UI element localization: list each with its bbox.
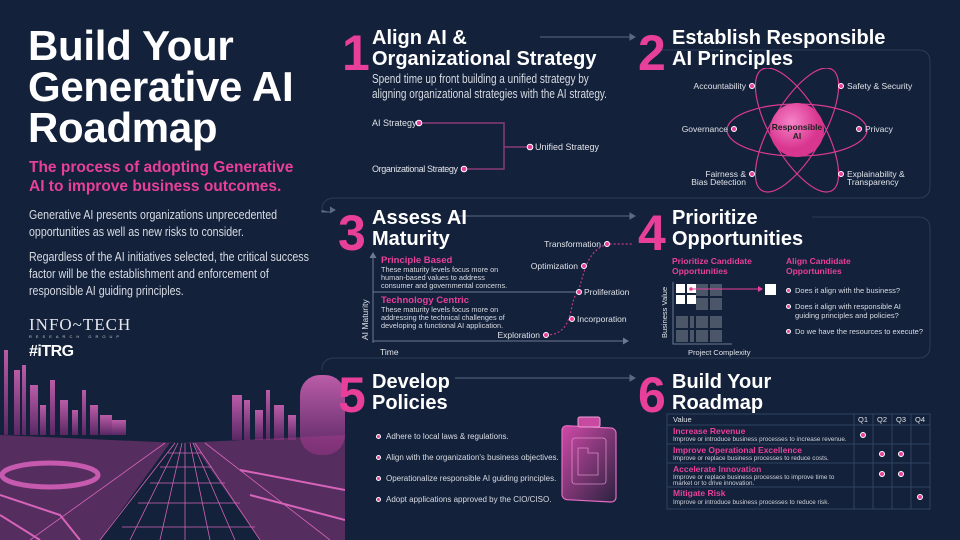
roadmap table: Value (673, 415, 692, 424)
chart: maturity curve: These maturity levels focus more on (381, 265, 498, 274)
align questions: guiding principles and policies? (795, 311, 899, 320)
title: Build Your (28, 22, 233, 69)
section 4 (638, 205, 923, 357)
subtitle: AI to improve business outcomes. (29, 178, 281, 195)
title 3: Maturity (372, 228, 450, 250)
title: Generative AI (28, 63, 293, 110)
chart: maturity curve: Exploration (497, 330, 540, 340)
roadmap table: Improve or introduce business processes to reduce risk. (673, 499, 829, 506)
title 2 (672, 27, 885, 70)
logo: #iTRG: #iTRG (29, 343, 74, 360)
title 3 (372, 207, 467, 250)
diagram: principles atom: Accountability (694, 81, 747, 91)
intro text (29, 208, 309, 298)
roadmap table: Q1 (858, 415, 868, 424)
diagram: principles atom: Bias Detection (691, 177, 746, 187)
policy list: Adhere to local laws & regulations. (386, 432, 509, 441)
chart: maturity curve: Principle Based (381, 255, 452, 266)
icon: clipboard (561, 416, 617, 503)
title 6: Build Your (672, 371, 771, 393)
matrix chart (660, 282, 776, 357)
title 2: AI Principles (672, 48, 793, 70)
roadmap table: Q3 (896, 415, 906, 424)
intro text: factor will be the establishment and enforcement of (29, 267, 269, 281)
roadmap table: Q2 (877, 415, 887, 424)
text 1: Spend time up front building a unified strategy by (372, 72, 589, 86)
diagram: principles atom: Transparency (847, 177, 899, 187)
section 1 (342, 25, 607, 174)
align questions (786, 286, 923, 336)
number 1: 1 (342, 25, 370, 81)
title 6: Roadmap (672, 392, 763, 414)
title 3: Assess AI (372, 207, 467, 229)
align questions: Does it align with the business? (795, 286, 900, 295)
section 3 (338, 205, 632, 357)
matrix chart: Project Complexity (688, 348, 751, 357)
diagram: unified strategy: Organizational Strategy (372, 164, 458, 174)
policy list: Align with the organization's business objectives. (386, 453, 559, 462)
roadmap table: market or to drive innovation. (673, 480, 754, 487)
title 1 (372, 27, 596, 70)
diagram: principles atom: Governance (682, 124, 728, 134)
diagram: principles atom: Safety & Security (847, 81, 913, 91)
prioritize subheading: Opportunities (672, 266, 728, 276)
policy list (376, 432, 559, 504)
subtitle: The process of adopting Generative (29, 159, 293, 176)
logo: Info-Tech: RESEARCH GROUP (29, 334, 123, 339)
title: Roadmap (28, 104, 217, 151)
diagram: principles atom: Fairness & (705, 169, 746, 179)
roadmap table: Improve or replace business processes to improve time to (673, 474, 835, 481)
number 3: 3 (338, 205, 366, 261)
diagram: principles atom: AI (793, 131, 801, 141)
number 6: 6 (638, 367, 666, 423)
chart: maturity curve: consumer and governmental concerns. (381, 281, 507, 290)
section 2 (638, 25, 913, 193)
background city illustration (0, 350, 345, 540)
chart: maturity curve: Proliferation (584, 287, 630, 297)
intro text: responsible AI guiding principles. (29, 284, 184, 298)
align subheading (786, 256, 851, 276)
chart: maturity curve: Technology Centric (381, 295, 469, 306)
diagram: unified strategy (372, 118, 600, 174)
section 5 (338, 367, 617, 504)
roadmap table: Improve or introduce business processes to increase revenue. (673, 436, 847, 443)
align subheading: Align Candidate (786, 256, 851, 266)
roadmap table (666, 414, 930, 510)
policy list: Adopt applications approved by the CIO/CISO. (386, 495, 551, 504)
title 4 (672, 207, 803, 250)
number 2: 2 (638, 25, 666, 81)
title (28, 22, 293, 151)
chart: maturity curve: developing a functional AI application. (381, 321, 503, 330)
chart: maturity curve: addressing the technical challenges of (381, 313, 506, 322)
chart: maturity curve: AI Maturity (360, 299, 370, 340)
diagram: principles atom: Privacy (865, 124, 894, 134)
chart: maturity curve: human-based values to address (381, 273, 485, 282)
diagram: principles atom: Explainability & (847, 169, 905, 179)
roadmap table: Q4 (915, 415, 925, 424)
roadmap table: Improve Operational Excellence (673, 445, 802, 455)
text 1 (372, 72, 607, 101)
section 6 (638, 367, 930, 510)
number 4: 4 (638, 205, 666, 261)
title 4: Prioritize (672, 207, 758, 229)
diagram: principles atom: Responsible (772, 122, 823, 132)
title 5: Develop (372, 371, 450, 393)
align subheading: Opportunities (786, 266, 842, 276)
roadmap table: Accelerate Innovation (673, 464, 761, 474)
title 1: Organizational Strategy (372, 48, 596, 70)
align questions: Does it align with responsible AI (795, 302, 901, 311)
number 5: 5 (338, 367, 366, 423)
prioritize subheading (672, 256, 752, 276)
intro text: opportunities as well as new risks to consider. Regardless of the AI initiatives selected, the critical success (29, 225, 309, 264)
subtitle (29, 159, 293, 195)
diagram: unified strategy: AI Strategy (372, 118, 417, 128)
intro text: Generative AI presents organizations unprecedented (29, 208, 277, 222)
title 6 (672, 371, 771, 414)
align questions: Do we have the resources to execute? (795, 327, 923, 336)
matrix chart: Business Value (660, 287, 669, 338)
roadmap table: Mitigate Risk (673, 488, 726, 498)
logo: Info-Tech: INFO~TECH (29, 315, 131, 334)
title 1: Align AI & (372, 27, 467, 49)
title 2: Establish Responsible (672, 27, 885, 49)
text 1: aligning organizational strategies with the AI strategy. (372, 87, 607, 101)
chart: maturity curve: Incorporation (577, 314, 627, 324)
diagram: principles atom (682, 68, 913, 193)
roadmap table: Improve or replace business processes to reduce costs. (673, 455, 829, 462)
chart: maturity curve: These maturity levels focus more on (381, 305, 498, 314)
chart: maturity curve: Time (380, 347, 399, 357)
policy list: Operationalize responsible AI guiding principles. (386, 474, 556, 483)
roadmap table: Increase Revenue (673, 426, 746, 436)
prioritize subheading: Prioritize Candidate (672, 256, 752, 266)
chart: maturity curve: Optimization (531, 261, 578, 271)
diagram: unified strategy: Unified Strategy (535, 142, 600, 152)
title 5: Policies (372, 392, 448, 414)
title 5 (372, 371, 450, 414)
chart: maturity curve (360, 240, 632, 357)
title 4: Opportunities (672, 228, 803, 250)
